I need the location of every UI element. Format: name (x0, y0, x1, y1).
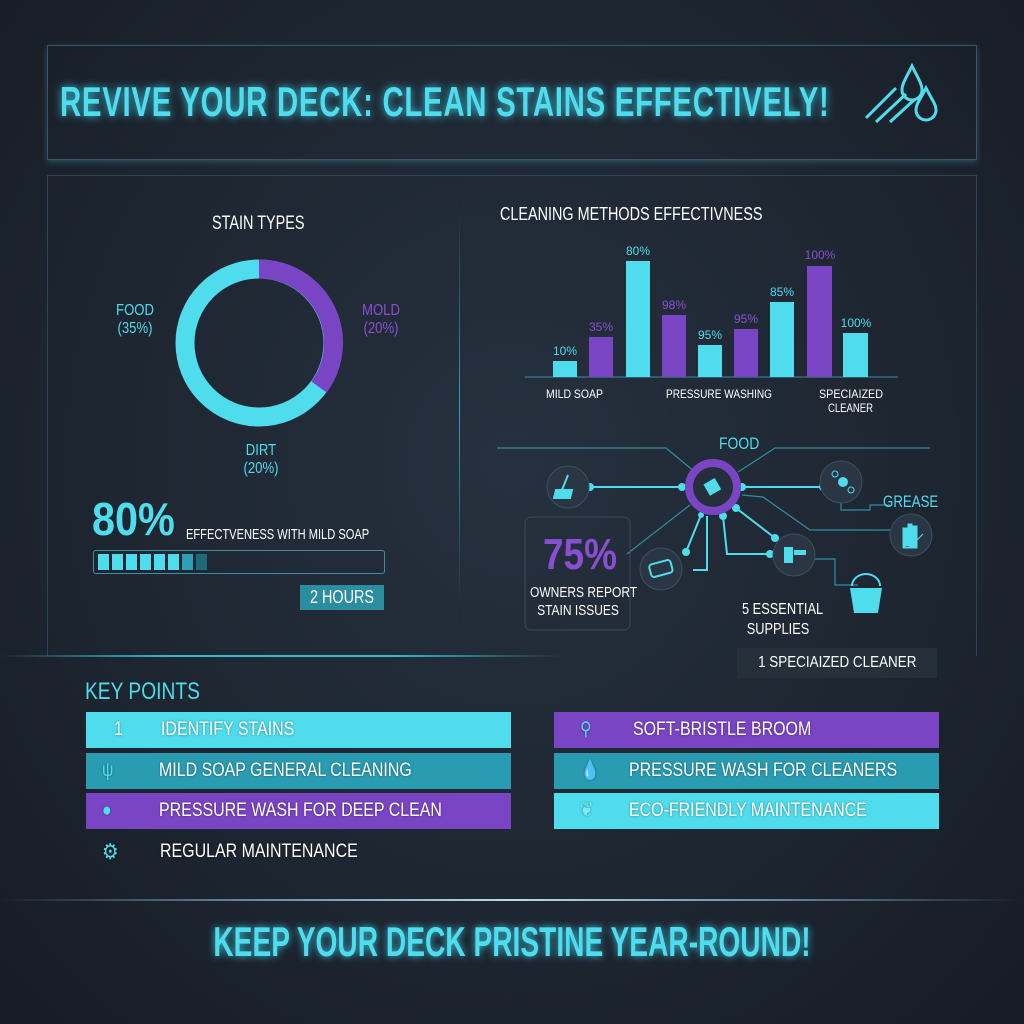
divider vertical (459, 200, 460, 620)
specialized cleaner badge (737, 648, 937, 678)
point: soft bristle: ⚲ (580, 719, 592, 740)
key points list (86, 712, 939, 864)
bar chart (525, 244, 898, 415)
bar chart: 100% (841, 316, 872, 330)
stat 75%: 75% (543, 530, 617, 579)
bar chart: CLEANER (828, 401, 873, 415)
stat label owners (530, 584, 637, 619)
point: mild soap (86, 753, 511, 789)
bar chart: 95% (734, 312, 758, 326)
supplies text (742, 601, 823, 638)
point: mild soap: MILD SOAP GENERAL CLEANING (159, 760, 412, 781)
bar chart: 98% (662, 298, 686, 312)
label food (116, 302, 154, 337)
heading: cleaning methods: CLEANING METHODS EFFECTIVNESS (500, 204, 762, 224)
specialized cleaner badge: 1 SPECIAIZED CLEANER (758, 654, 916, 671)
donut chart (176, 260, 343, 426)
point: pressure wash cleaners: 💧 (580, 760, 600, 781)
bar chart: MILD SOAP (546, 387, 603, 401)
point: pressure wash deep (86, 793, 511, 829)
label mold: (20%) (363, 320, 399, 337)
point: identify stains: 1 (114, 719, 123, 740)
badge 2 hours (300, 585, 384, 610)
point: pressure wash cleaners: PRESSURE WASH FOR CLEANERS (629, 760, 897, 781)
bar chart: SPECIAIZED (819, 387, 883, 401)
label dirt: (20%) (243, 460, 279, 477)
heading: stain types: STAIN TYPES (212, 213, 305, 234)
point: pressure wash cleaners (554, 753, 939, 789)
bar chart: 80% (626, 244, 650, 258)
stat label owners: OWNERS REPORT (530, 584, 637, 601)
label dirt (243, 442, 279, 477)
label food: (35%) (117, 320, 153, 337)
point: regular maintenance (102, 839, 358, 864)
point: regular maintenance: REGULAR MAINTENANCE (160, 841, 358, 862)
point: pressure wash deep: ● (102, 800, 112, 821)
network diagram (497, 447, 932, 630)
divider (0, 899, 1024, 901)
label food node: FOOD (719, 434, 759, 453)
header frame (47, 45, 977, 160)
point: eco friendly: ❦ (580, 800, 593, 821)
label dirt: DIRT (246, 442, 276, 459)
bar chart: PRESSURE WASHING (666, 387, 772, 401)
badge 2 hours: 2 HOURS (310, 587, 374, 607)
label mold (362, 302, 400, 337)
bar chart: 35% (589, 320, 613, 334)
main panel frame (47, 175, 977, 656)
supplies text: SUPPLIES (747, 621, 809, 638)
point: regular maintenance: ⚙ (102, 839, 119, 864)
stat label: EFFECTVENESS WITH MILD SOAP (186, 526, 369, 543)
point: identify stains (86, 712, 511, 748)
point: eco friendly (554, 793, 939, 829)
stat 80%: 80% (92, 493, 175, 545)
stat label owners: STAIN ISSUES (537, 602, 619, 619)
heading: key points: KEY POINTS (85, 678, 200, 705)
supplies text: 5 ESSENTIAL (742, 601, 823, 618)
bar chart: 100% (805, 248, 836, 262)
footer title: KEEP YOUR DECK PRISTINE YEAR-ROUND! (213, 918, 811, 965)
point: soft bristle (554, 712, 939, 748)
label mold: MOLD (362, 302, 400, 319)
progress bar (93, 550, 385, 574)
point: mild soap: ψ (102, 760, 113, 781)
point: pressure wash deep: PRESSURE WASH FOR DEEP CLEAN (159, 800, 442, 821)
point: soft bristle: SOFT-BRISTLE BROOM (633, 719, 811, 740)
title: REVIVE YOUR DECK: CLEAN STAINS EFFECTIVELY! (60, 78, 830, 125)
bar chart: 10% (553, 344, 577, 358)
bar chart: 85% (770, 285, 794, 299)
point: eco friendly: ECO-FRIENDLY MAINTENANCE (629, 800, 867, 821)
point: identify stains: IDENTIFY STAINS (161, 719, 294, 740)
label food: FOOD (116, 302, 154, 319)
label grease: GREASE (883, 492, 938, 511)
bar chart: 95% (698, 328, 722, 342)
icon: water drops (865, 62, 938, 124)
